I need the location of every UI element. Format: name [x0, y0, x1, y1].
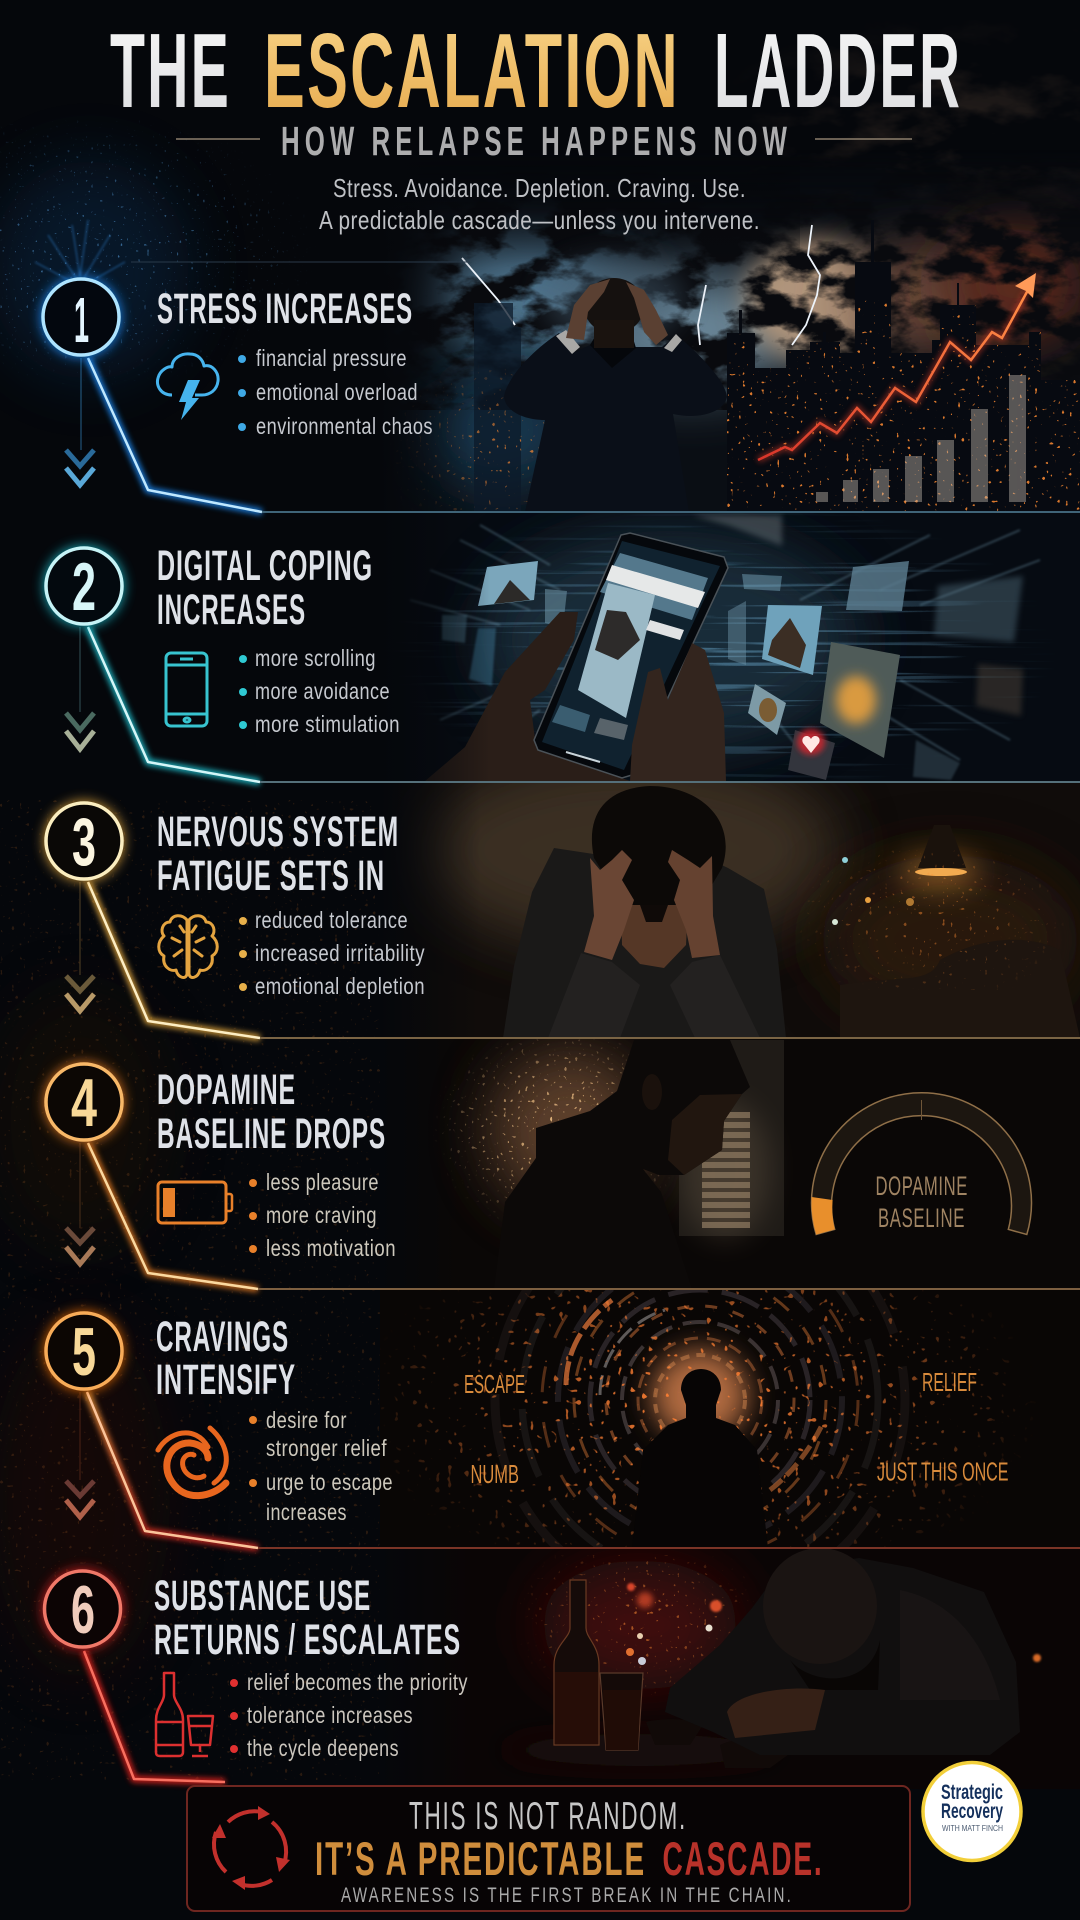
heading 6: SUBSTANCE USE [154, 1572, 371, 1620]
icon: heart on feed card [802, 736, 820, 753]
panel: nervous system photo, exhausted woman [414, 783, 1080, 1037]
heading 2 [157, 542, 373, 634]
arrow: chevrons 1 [66, 450, 94, 485]
icon: brain [159, 916, 217, 977]
callout text: CASCADE. [662, 1832, 824, 1885]
bokeh lights [800, 850, 1056, 990]
logo badge: Recovery [941, 1800, 1003, 1823]
ashtray and table clutter [765, 1755, 780, 1768]
panel: digital coping photo, phone and floating feeds [380, 513, 1080, 781]
bullets 1 [238, 345, 433, 439]
number badge 3 [44, 801, 124, 881]
arrow: chevrons 5 [66, 1481, 94, 1517]
step 2: digital coping increases [44, 542, 400, 749]
bottle and glass [554, 1580, 643, 1750]
bullets 3: reduced tolerance [255, 907, 408, 933]
bullets 5 [249, 1407, 393, 1525]
number badge 5: 5 [72, 1314, 96, 1390]
number badge 6: 6 [71, 1572, 95, 1648]
connector 6 [84, 1651, 225, 1782]
connector 2 [80, 627, 1080, 782]
arrow: chevrons 3 [66, 976, 94, 1011]
heading 2: INCREASES [157, 586, 306, 634]
ladder connector lines [80, 262, 1080, 1782]
burst rays above circle 1 [35, 220, 125, 282]
number badge 2: 2 [72, 549, 96, 625]
word labels: ESCAPE [464, 1369, 525, 1399]
logo badge [923, 1762, 1021, 1860]
lamp glow [900, 825, 980, 888]
bullets 3: increased irritability [255, 940, 425, 966]
left hand [425, 612, 630, 781]
main title: THE [110, 12, 231, 130]
word labels: RELIEF [922, 1367, 977, 1397]
motion streaks [410, 525, 1040, 775]
bullets 4 [249, 1169, 396, 1261]
word labels: NUMB [470, 1459, 519, 1489]
heading 6: RETURNS / ESCALATES [154, 1616, 461, 1664]
logo badge: Strategic [941, 1781, 1003, 1804]
icon: smartphone [166, 653, 207, 726]
arrow: chevrons 4 [66, 1228, 94, 1264]
man with hands on head [504, 258, 727, 512]
bullets 2: more scrolling [255, 645, 376, 671]
number badge 1: 1 [74, 284, 89, 356]
bullets 3: emotional depletion [255, 973, 425, 999]
bullets 1: emotional overload [256, 379, 418, 405]
number badge 5 [44, 1311, 124, 1391]
panel: stress photo, storm and city [396, 197, 1080, 511]
vortex rings [490, 1290, 910, 1547]
number badge 4: 4 [71, 1065, 97, 1141]
step 5: cravings intensify [44, 1311, 393, 1525]
figure from behind [632, 1369, 768, 1548]
gauge label: BASELINE [878, 1203, 965, 1233]
number badge 3: 3 [72, 804, 96, 880]
bullets 5: increases [266, 1499, 347, 1525]
main title: ESCALATION [264, 12, 680, 130]
icon: cycle arrows [212, 1806, 290, 1890]
heading 5 [156, 1313, 296, 1404]
arrow: chevrons 2 [66, 713, 94, 749]
subtitle with side rules: HOW RELAPSE HAPPENS NOW [281, 118, 792, 164]
heading 5: CRAVINGS [156, 1313, 289, 1361]
heading 3: FATIGUE SETS IN [157, 852, 385, 900]
callout: predictable cascade [187, 1786, 910, 1911]
right hand [630, 643, 726, 781]
bullets 1: financial pressure [256, 345, 407, 371]
callout text [315, 1795, 824, 1907]
woman with hands on head [503, 786, 786, 1038]
gauge: dopamine baseline [811, 1093, 1032, 1234]
bullets 2 [239, 645, 400, 737]
panel: dopamine photo, man and dust [435, 1039, 1032, 1253]
heading 4 [157, 1066, 386, 1158]
callout text: IT’S A PREDICTABLE [315, 1832, 646, 1885]
floating feed cards [442, 561, 1023, 780]
bullets 1: environmental chaos [256, 413, 433, 439]
bullets 3 [239, 907, 425, 999]
bullets 6: tolerance increases [247, 1702, 413, 1728]
bullets 4: less pleasure [266, 1169, 379, 1195]
intro text [319, 173, 760, 235]
phone [534, 533, 728, 778]
step 1: stress increases [35, 220, 433, 485]
heading 4: DOPAMINE [157, 1066, 296, 1114]
bullets 6 [230, 1669, 468, 1761]
window with blinds [679, 1040, 784, 1240]
logo badge: WITH MATT FINCH [942, 1824, 1003, 1833]
step 6: substance use returns [42, 1569, 468, 1761]
slumped man [665, 1548, 1020, 1755]
heading 3: NERVOUS SYSTEM [157, 808, 399, 856]
intro text: A predictable cascade—unless you intervene. [319, 205, 760, 235]
number badge 4 [44, 1062, 124, 1142]
callout text: THIS IS NOT RANDOM. [409, 1795, 687, 1838]
bullets 6: the cycle deepens [247, 1735, 399, 1761]
panel: cravings photo, vortex and figure [381, 1290, 1035, 1547]
number badge 2 [44, 546, 124, 626]
heading 1: STRESS INCREASES [157, 285, 413, 333]
word labels [464, 1367, 1008, 1489]
intro text: Stress. Avoidance. Depletion. Craving. Use. [333, 173, 746, 203]
icon: storm cloud [158, 354, 218, 420]
bar chart [816, 375, 1026, 502]
step 4: dopamine baseline drops [44, 1062, 396, 1264]
bullets 2: more stimulation [255, 711, 400, 737]
heading 3 [157, 808, 399, 900]
connector 5 [80, 1392, 1080, 1548]
bullets 5: desire for [266, 1407, 347, 1433]
rising red line chart with arrow [758, 273, 1036, 460]
number badge 6 [42, 1569, 122, 1649]
skyline [390, 220, 1080, 512]
heading 5: INTENSIFY [156, 1356, 296, 1404]
connector 3 [80, 882, 1080, 1038]
callout text: AWARENESS IS THE FIRST BREAK IN THE CHAIN. [341, 1884, 793, 1907]
heading 6 [154, 1572, 461, 1664]
icon: low battery [158, 1182, 232, 1223]
gauge label: DOPAMINE [876, 1171, 968, 1201]
bullets 2: more avoidance [255, 678, 390, 704]
bed in background [840, 940, 1080, 1038]
bullets 5: urge to escape [266, 1469, 393, 1495]
bullets 4: more craving [266, 1202, 377, 1228]
connector 1 [81, 262, 1080, 512]
icon: bottle and glass [156, 1673, 213, 1756]
panel: substance use photo, man slumped over table [500, 1549, 1043, 1779]
bullets 6: relief becomes the priority [247, 1669, 468, 1695]
number badge 1 [41, 277, 121, 357]
heading 2: DIGITAL COPING [157, 542, 373, 590]
bullets 5: stronger relief [266, 1435, 387, 1461]
connector 4 [80, 1143, 1080, 1289]
icon: lightning bolts [462, 225, 820, 345]
gauge label [876, 1176, 967, 1228]
storm sky [408, 197, 1080, 511]
step 3: nervous system fatigue [44, 801, 425, 1011]
man looking down [503, 1040, 750, 1237]
bullets 4: less motivation [266, 1235, 396, 1261]
heading 4: BASELINE DROPS [157, 1110, 386, 1158]
icon: swirl [158, 1428, 226, 1496]
bokeh lights [520, 1555, 1041, 1695]
